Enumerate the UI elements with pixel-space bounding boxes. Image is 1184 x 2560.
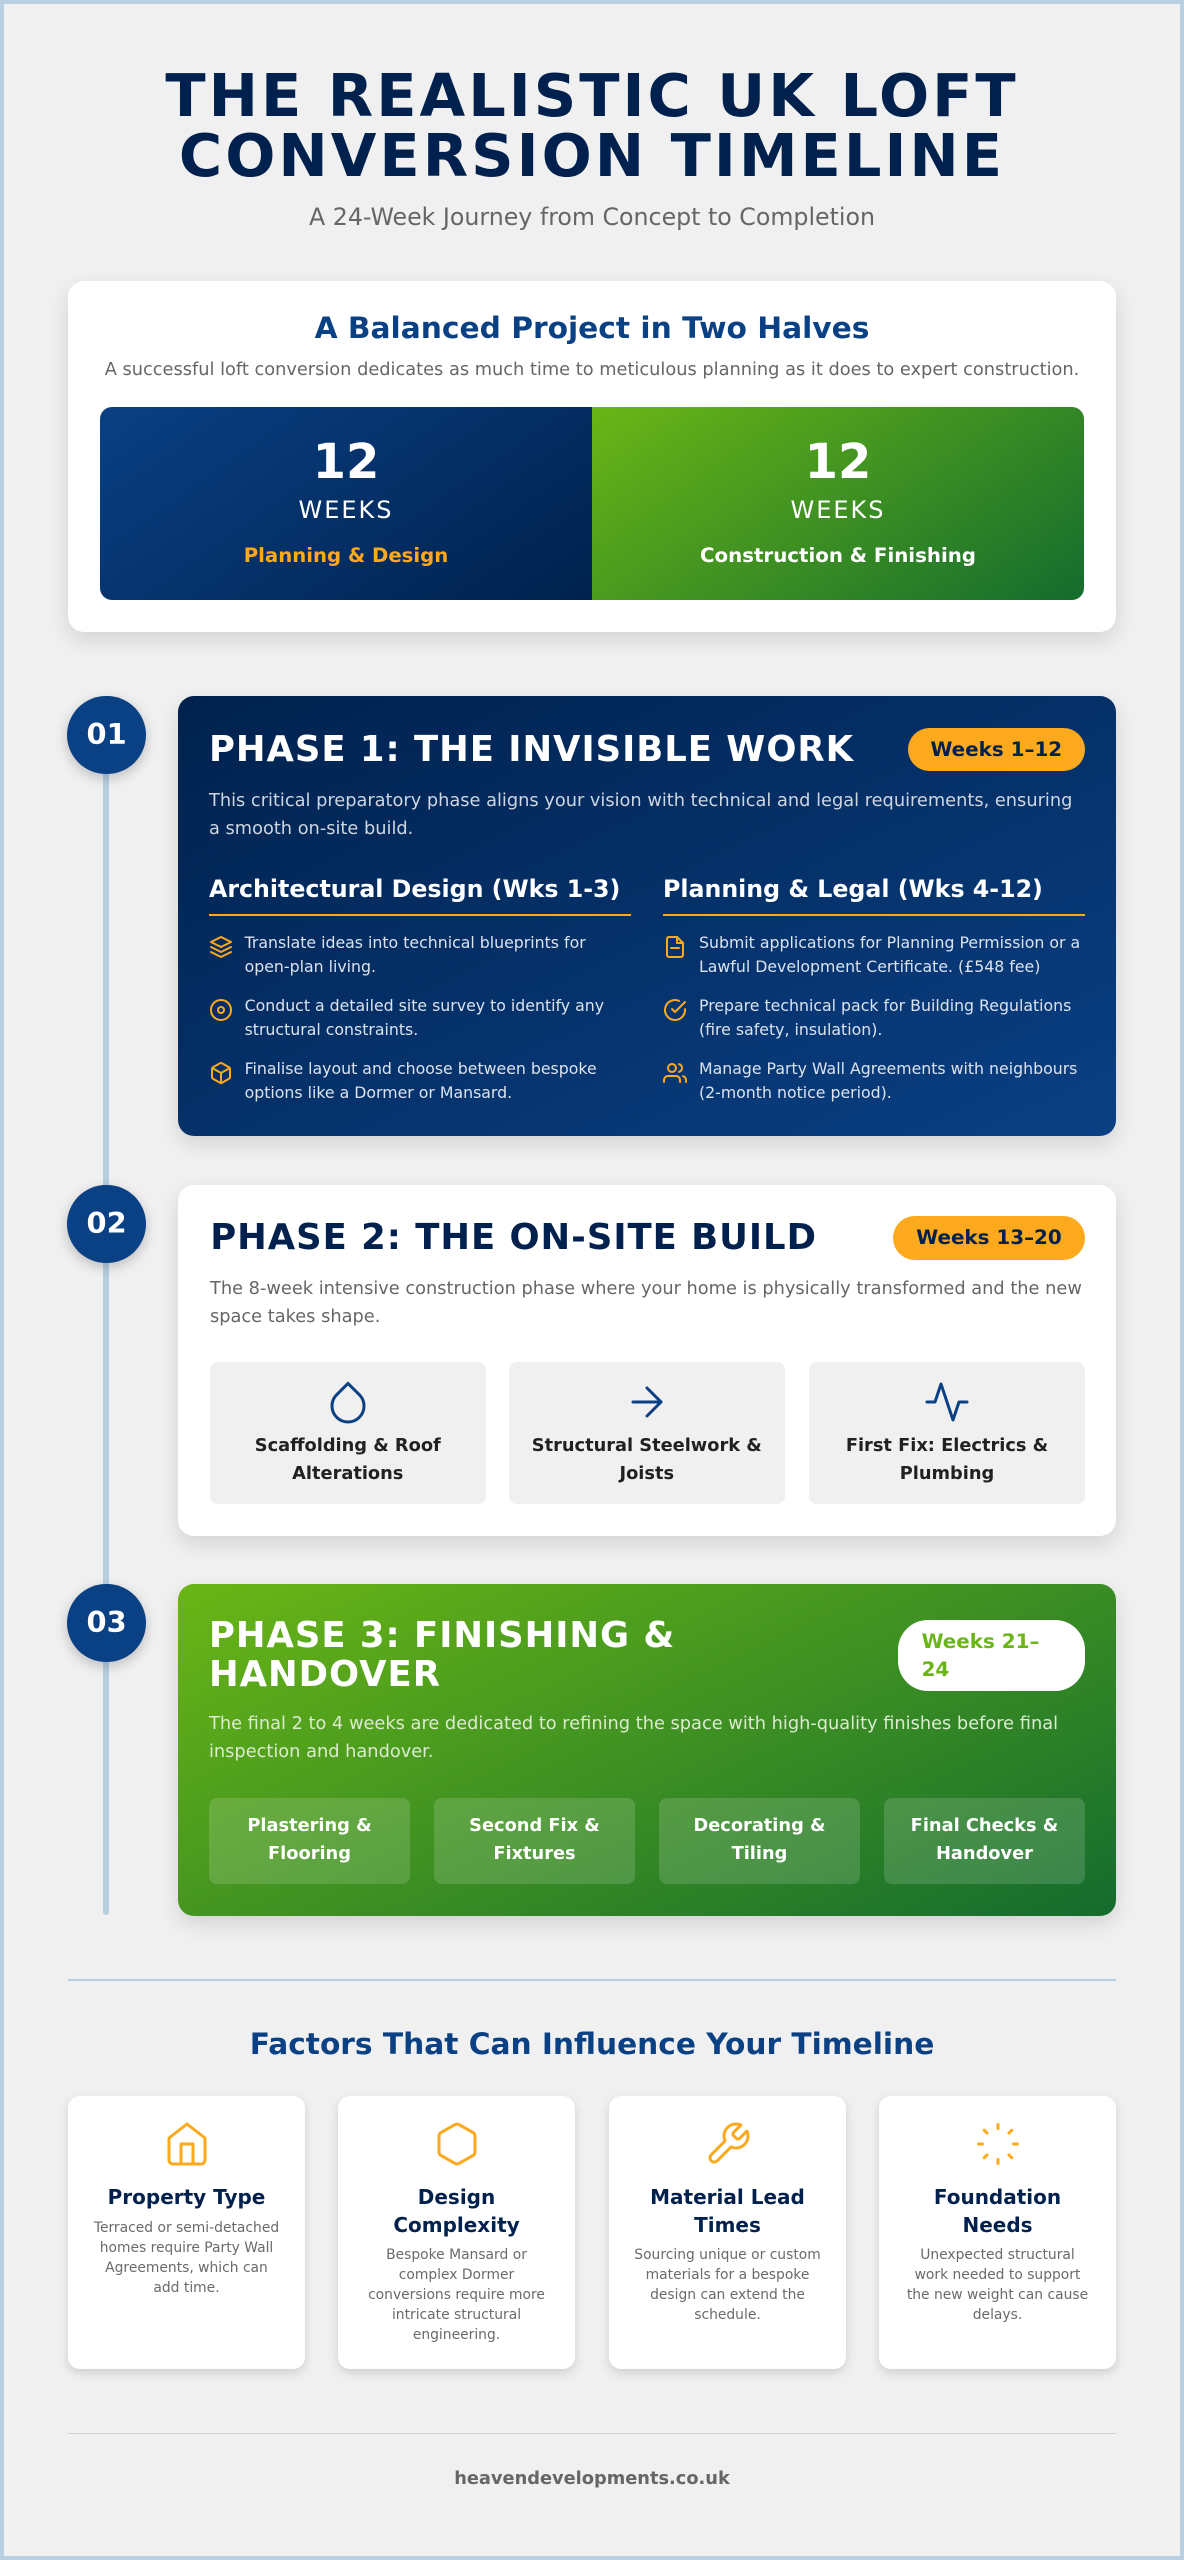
phase 2 heading: PHASE 2: THE ON-SITE BUILD bbox=[210, 1216, 817, 1258]
text bbox=[245, 1059, 597, 1102]
icon: activity bbox=[926, 1382, 968, 1422]
text: Submit applications for Planning Permission or a bbox=[699, 933, 1080, 952]
title: CONVERSION TIMELINE bbox=[179, 120, 1005, 190]
description: Terraced or semi-detached bbox=[94, 2220, 279, 2236]
factor card: foundation needs bbox=[879, 2096, 1116, 2369]
description: the new weight can cause bbox=[907, 2287, 1088, 2303]
step: steelwork bbox=[509, 1362, 785, 1504]
description: intricate structural bbox=[392, 2307, 521, 2323]
step number 02 bbox=[67, 1184, 146, 1263]
icon: file bbox=[666, 936, 684, 958]
step: final checks: Final Checks & bbox=[911, 1815, 1058, 1836]
planning label: Planning & Design bbox=[244, 544, 448, 567]
text bbox=[699, 933, 1080, 976]
text bbox=[532, 1435, 762, 1484]
heading: Times bbox=[694, 2213, 761, 2237]
text: Lawful Development Certificate. (£548 fee) bbox=[699, 957, 1040, 976]
text bbox=[244, 933, 586, 976]
description bbox=[368, 2247, 545, 2343]
phase 3 weeks pill: 24 bbox=[922, 1658, 949, 1681]
heading bbox=[650, 2185, 805, 2237]
step: second fix: Second Fix & bbox=[469, 1815, 600, 1836]
phase 1 heading: PHASE 1: THE INVISIBLE WORK bbox=[209, 728, 854, 770]
phase 3 description bbox=[208, 1714, 1058, 1762]
text: Joists bbox=[619, 1463, 674, 1484]
heading bbox=[934, 2185, 1061, 2237]
description: engineering. bbox=[413, 2327, 500, 2343]
phase 2 weeks pill bbox=[893, 1216, 1085, 1260]
step: decorating bbox=[659, 1798, 860, 1884]
phase 3 heading bbox=[209, 1614, 675, 1694]
text bbox=[245, 996, 604, 1039]
heading: Design bbox=[418, 2185, 495, 2209]
description: Sourcing unique or custom bbox=[634, 2247, 821, 2263]
step: decorating: Decorating & bbox=[693, 1815, 826, 1836]
description: Bespoke Mansard or bbox=[386, 2247, 527, 2263]
phase 3 description: The final 2 to 4 weeks are dedicated to refining the space with high-quality finishes before final bbox=[209, 1714, 1058, 1734]
step: final checks: Handover bbox=[936, 1843, 1033, 1864]
phase 2 description: The 8-week intensive construction phase where your home is physically transformed and the new bbox=[210, 1279, 1082, 1299]
list item: applications bbox=[666, 933, 1080, 976]
text: Prepare technical pack for Building Regulations bbox=[699, 996, 1071, 1015]
step: plastering: Plastering & bbox=[247, 1815, 372, 1836]
icon: check circle bbox=[664, 999, 686, 1021]
step: first fix bbox=[809, 1362, 1085, 1504]
construction label: Construction & Finishing bbox=[700, 544, 976, 567]
summary heading: A Balanced Project in Two Halves bbox=[315, 311, 869, 346]
phase 1 weeks pill bbox=[908, 728, 1085, 771]
text bbox=[699, 996, 1071, 1039]
heading: Foundation bbox=[934, 2185, 1061, 2209]
phase 3 heading: PHASE 3: FINISHING & bbox=[209, 1614, 675, 1656]
step number 01: 01 bbox=[87, 717, 127, 751]
heading bbox=[393, 2185, 520, 2237]
panel: phase 1 bbox=[178, 696, 1116, 1136]
construction weeks number: 12 bbox=[805, 434, 871, 490]
description: delays. bbox=[973, 2307, 1022, 2323]
factors heading: Factors That Can Influence Your Timeline bbox=[250, 2026, 934, 2061]
text: open-plan living. bbox=[245, 957, 376, 976]
icon: hexagon bbox=[438, 2122, 476, 2166]
description: schedule. bbox=[694, 2307, 761, 2323]
phase 2 description bbox=[210, 1279, 1082, 1327]
text: (2-month notice period). bbox=[699, 1083, 892, 1102]
phase 3 heading: HANDOVER bbox=[209, 1654, 441, 1694]
timeline line bbox=[103, 740, 109, 1915]
text: Alterations bbox=[292, 1463, 403, 1484]
text bbox=[699, 1059, 1077, 1102]
phase 2 description: space takes shape. bbox=[210, 1307, 380, 1327]
text: Plumbing bbox=[900, 1463, 994, 1484]
step: scaffolding bbox=[210, 1362, 486, 1504]
factor card: design complexity bbox=[338, 2096, 575, 2369]
planning weeks number: 12 bbox=[313, 434, 379, 490]
factor card: material lead times bbox=[609, 2096, 846, 2369]
heading: Needs bbox=[962, 2213, 1033, 2237]
planning weeks label: WEEKS bbox=[298, 496, 394, 524]
text bbox=[846, 1435, 1048, 1484]
column rule bbox=[209, 914, 631, 916]
panel: phase 3 bbox=[178, 1584, 1116, 1916]
column heading: planning and legal: Planning & Legal (Wks 4-12) bbox=[663, 875, 1043, 903]
phase 1 description: a smooth on-site build. bbox=[209, 818, 413, 838]
text: Scaffolding & Roof bbox=[255, 1435, 441, 1456]
step: second fix bbox=[434, 1798, 635, 1884]
step number 01 bbox=[67, 696, 146, 774]
icon: house bbox=[168, 2122, 206, 2166]
list item: technical pack bbox=[664, 996, 1071, 1039]
description: Agreements, which can bbox=[105, 2260, 268, 2276]
panel: balanced project summary bbox=[68, 281, 1116, 632]
icon: layers bbox=[210, 936, 232, 958]
description: work needed to support bbox=[915, 2267, 1080, 2283]
phase 1 weeks pill: Weeks 1–12 bbox=[930, 738, 1062, 761]
list item: party wall bbox=[663, 1059, 1077, 1102]
subtitle: A 24-Week Journey from Concept to Completion bbox=[309, 203, 875, 231]
text: Conduct a detailed site survey to identify any bbox=[245, 996, 604, 1015]
footer divider bbox=[68, 2433, 1116, 2434]
text: Translate ideas into technical blueprints for bbox=[245, 933, 586, 952]
description: conversions require more bbox=[368, 2287, 545, 2303]
text: Structural Steelwork & bbox=[532, 1435, 762, 1456]
icon: box bbox=[211, 1062, 231, 1084]
description: complex Dormer bbox=[399, 2267, 514, 2283]
list item: blueprints bbox=[210, 933, 586, 976]
planning half bbox=[100, 407, 592, 600]
phase 3 description: inspection and handover. bbox=[209, 1742, 433, 1762]
text bbox=[255, 1435, 441, 1484]
icon: droplet bbox=[330, 1382, 366, 1424]
heading: Property Type bbox=[108, 2185, 265, 2209]
text: options like a Dormer or Mansard. bbox=[245, 1083, 512, 1102]
list item: layout bbox=[211, 1059, 597, 1102]
icon: users bbox=[663, 1063, 687, 1083]
icon: target bbox=[210, 999, 232, 1021]
phase 3 weeks pill: Weeks 21– bbox=[922, 1630, 1039, 1653]
icon: wrench bbox=[708, 2122, 750, 2164]
step number 03 bbox=[67, 1584, 146, 1662]
text: First Fix: Electrics & bbox=[846, 1435, 1048, 1456]
description: design can extend the bbox=[650, 2287, 805, 2303]
step number 02: 02 bbox=[87, 1206, 127, 1240]
step: plastering bbox=[209, 1798, 410, 1884]
description: add time. bbox=[153, 2280, 220, 2296]
list item: site survey bbox=[210, 996, 604, 1039]
text: Finalise layout and choose between bespoke bbox=[245, 1059, 597, 1078]
column heading: architectural design: Architectural Design (Wks 1-3) bbox=[209, 875, 620, 903]
description bbox=[634, 2247, 821, 2323]
step: second fix: Fixtures bbox=[493, 1843, 576, 1864]
summary description: A successful loft conversion dedicates as much time to meticulous planning as it does to expert construction. bbox=[105, 358, 1079, 380]
two halves bar bbox=[100, 407, 1084, 600]
construction half bbox=[592, 407, 1084, 600]
text: Manage Party Wall Agreements with neighbours bbox=[699, 1059, 1077, 1078]
icon: arrow bbox=[632, 1386, 663, 1418]
description: homes require Party Wall bbox=[100, 2240, 273, 2256]
step number 03: 03 bbox=[87, 1605, 127, 1639]
step: decorating: Tiling bbox=[732, 1843, 787, 1864]
construction weeks label: WEEKS bbox=[790, 496, 886, 524]
text: (fire safety, insulation). bbox=[699, 1020, 882, 1039]
phase 3 weeks pill bbox=[898, 1620, 1085, 1691]
title bbox=[165, 60, 1019, 190]
phase 1 description: This critical preparatory phase aligns your vision with technical and legal requirements, ensuring bbox=[209, 790, 1072, 810]
description bbox=[94, 2220, 279, 2296]
icon: loader bbox=[977, 2123, 1019, 2165]
step: final checks bbox=[884, 1798, 1085, 1884]
heading: Complexity bbox=[393, 2213, 520, 2237]
column rule bbox=[663, 914, 1085, 916]
factor card: property type bbox=[68, 2096, 305, 2369]
heading: Material Lead bbox=[650, 2185, 805, 2209]
text: structural constraints. bbox=[245, 1020, 418, 1039]
description: Unexpected structural bbox=[920, 2247, 1075, 2263]
description: materials for a bespoke bbox=[646, 2267, 809, 2283]
description bbox=[879, 2245, 1116, 2325]
phase 1 description bbox=[208, 790, 1072, 838]
footer: heavendevelopments.co.uk bbox=[454, 2468, 730, 2488]
title: THE REALISTIC UK LOFT bbox=[165, 60, 1019, 130]
step: plastering: Flooring bbox=[268, 1843, 351, 1864]
phase 2 weeks pill: Weeks 13–20 bbox=[916, 1226, 1062, 1249]
panel: phase 2 bbox=[178, 1185, 1116, 1536]
section divider bbox=[68, 1979, 1116, 1981]
